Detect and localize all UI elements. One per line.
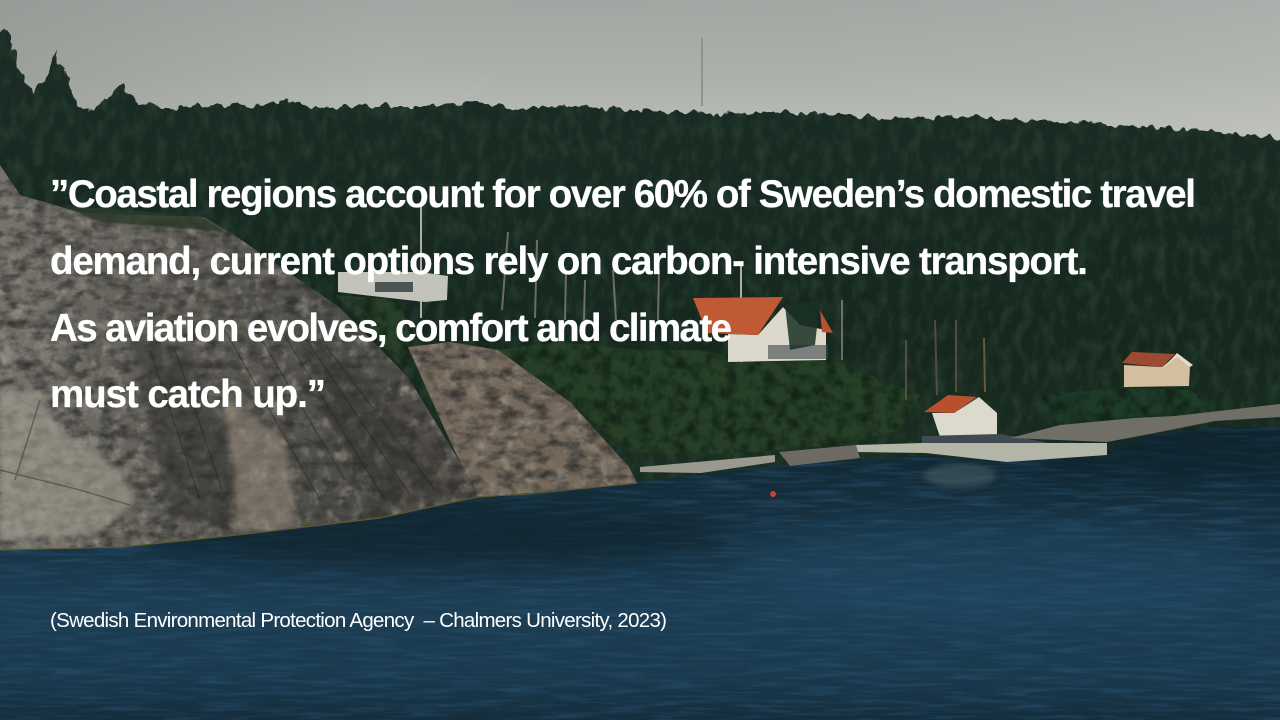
house: red roof centre xyxy=(693,297,833,362)
house: right xyxy=(1122,352,1193,387)
forest xyxy=(0,30,1280,520)
house: white left xyxy=(338,272,448,302)
quote: demand, current options rely on carbon- intensive transport. xyxy=(50,240,1088,283)
flagpoles xyxy=(421,205,741,362)
quote: As aviation evolves, comfort and climate xyxy=(50,307,732,350)
quote: must catch up.” xyxy=(50,373,326,416)
far shore rocks xyxy=(1010,404,1280,442)
quote xyxy=(50,173,1196,416)
main rock cliff xyxy=(0,165,477,550)
water shading xyxy=(130,431,1280,620)
right rock outcrop xyxy=(408,342,637,497)
buoy xyxy=(770,491,776,497)
quote: ”Coastal regions account for over 60% of Sweden’s domestic travel xyxy=(50,173,1196,216)
dock xyxy=(856,434,1107,462)
house: waterfront xyxy=(924,395,997,437)
sky xyxy=(0,0,1280,145)
source citation: (Swedish Environmental Protection Agency – Chalmers University, 2023) xyxy=(50,609,667,632)
radio mast xyxy=(701,38,703,106)
water xyxy=(0,427,1280,720)
foreground green hillside xyxy=(498,342,920,455)
shoreline moss xyxy=(0,483,637,550)
rock top moss xyxy=(60,205,225,232)
shoreline rocks xyxy=(779,445,860,466)
tree trunks xyxy=(502,232,985,400)
jetty xyxy=(640,455,775,473)
